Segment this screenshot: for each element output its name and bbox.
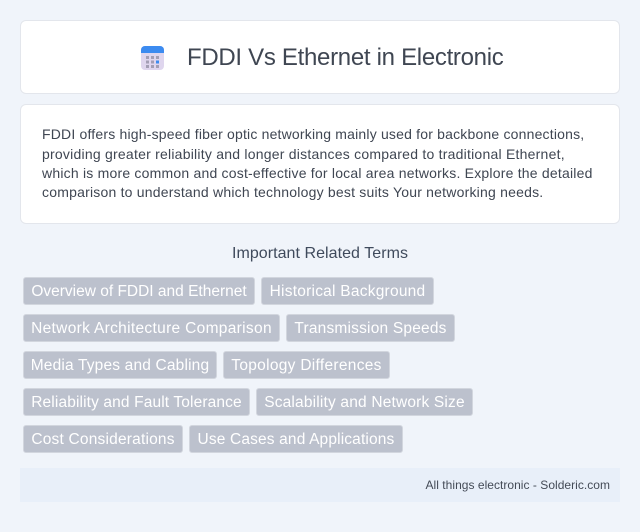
- tag: Historical Background: [270, 283, 425, 300]
- intro paragraph: comparison to understand which technology best suits Your networking needs.: [42, 184, 543, 200]
- tag: [23, 314, 280, 342]
- tag: Scalability and Network Size: [264, 394, 465, 411]
- tag: [189, 425, 403, 453]
- tag: Topology Differences: [231, 357, 382, 374]
- tag: [23, 425, 183, 453]
- tag list: [23, 277, 473, 453]
- footer text: All things electronic - Solderic.com: [426, 478, 610, 492]
- tag: [286, 314, 455, 342]
- header card: [20, 20, 620, 94]
- tag: Overview of FDDI and Ethernet: [31, 283, 247, 300]
- section heading: Important Related Terms: [232, 245, 408, 262]
- footer bar: [20, 468, 620, 502]
- intro paragraph: which is more common and cost-effective for local area networks. Explore the detailed: [42, 165, 593, 181]
- tag: Use Cases and Applications: [198, 431, 394, 448]
- title: FDDI Vs Ethernet in Electronic: [187, 44, 503, 71]
- tag: Reliability and Fault Tolerance: [31, 394, 242, 411]
- intro paragraph: providing greater reliability and longer distances compared to traditional Ethernet,: [42, 146, 565, 162]
- tag: Transmission Speeds: [294, 320, 447, 337]
- intro paragraph: FDDI offers high-speed fiber optic networking mainly used for backbone connections,: [42, 126, 584, 142]
- tag: Cost Considerations: [31, 431, 175, 448]
- tag: Media Types and Cabling: [31, 357, 209, 374]
- tag: Network Architecture Comparison: [31, 320, 272, 337]
- tag: [23, 351, 217, 379]
- tag: [261, 277, 434, 305]
- intro card: [20, 104, 620, 224]
- tag: [23, 388, 250, 416]
- tag: [223, 351, 390, 379]
- tag: [23, 277, 255, 305]
- icon: calendar: [141, 46, 164, 70]
- intro paragraph: [42, 126, 593, 200]
- tag: [256, 388, 473, 416]
